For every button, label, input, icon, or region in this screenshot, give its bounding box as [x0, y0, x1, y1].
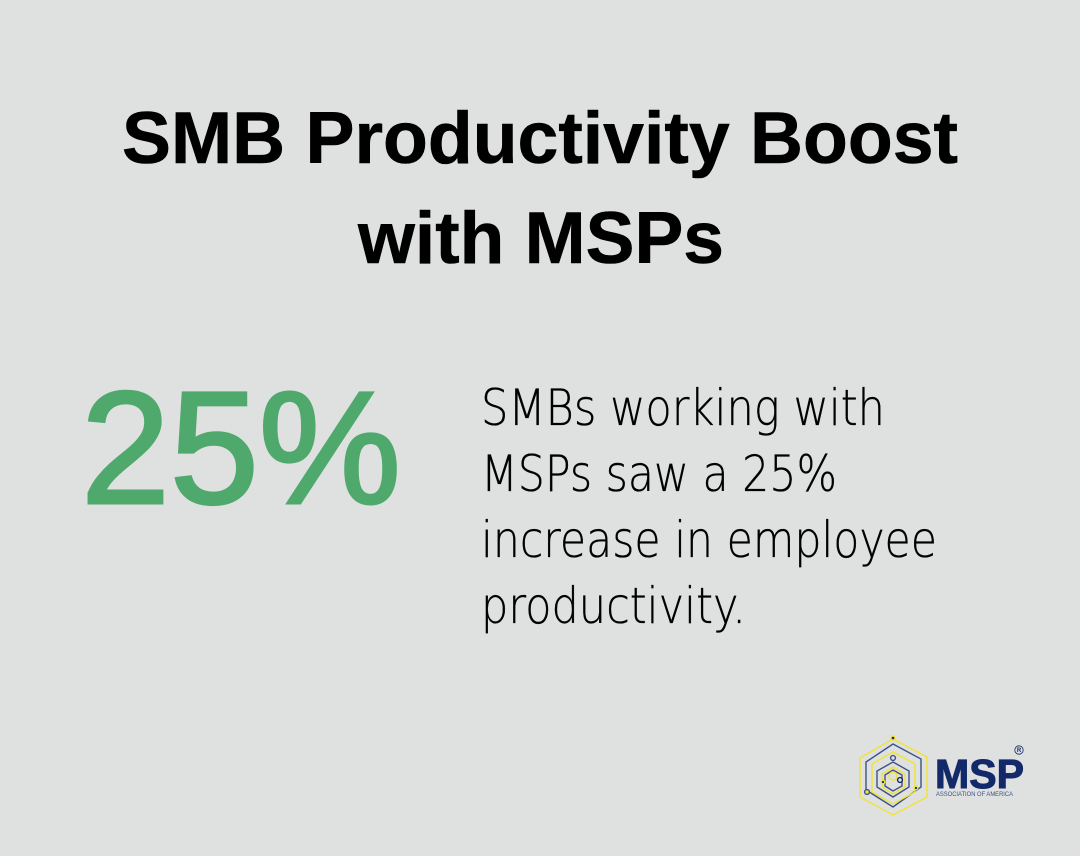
title: SMB Productivity Boost	[122, 98, 958, 179]
description text: MSPs saw a 25%	[481, 445, 837, 503]
description text: SMBs working with	[481, 379, 885, 437]
title: with MSPs	[357, 198, 724, 279]
description text	[481, 379, 937, 635]
logo: MSP Association of America	[860, 736, 1024, 815]
icon: circuit hexagon	[860, 736, 927, 815]
registered mark: R	[1017, 748, 1022, 754]
logo tagline: ASSOCIATION OF AMERICA	[936, 791, 1014, 798]
registered mark	[1015, 746, 1023, 754]
description text: increase in employee	[481, 511, 937, 569]
title	[122, 98, 958, 279]
big statistic: 25%: 25%	[81, 358, 401, 537]
description text: productivity.	[481, 577, 746, 635]
logo wordmark: MSP	[935, 751, 1024, 797]
